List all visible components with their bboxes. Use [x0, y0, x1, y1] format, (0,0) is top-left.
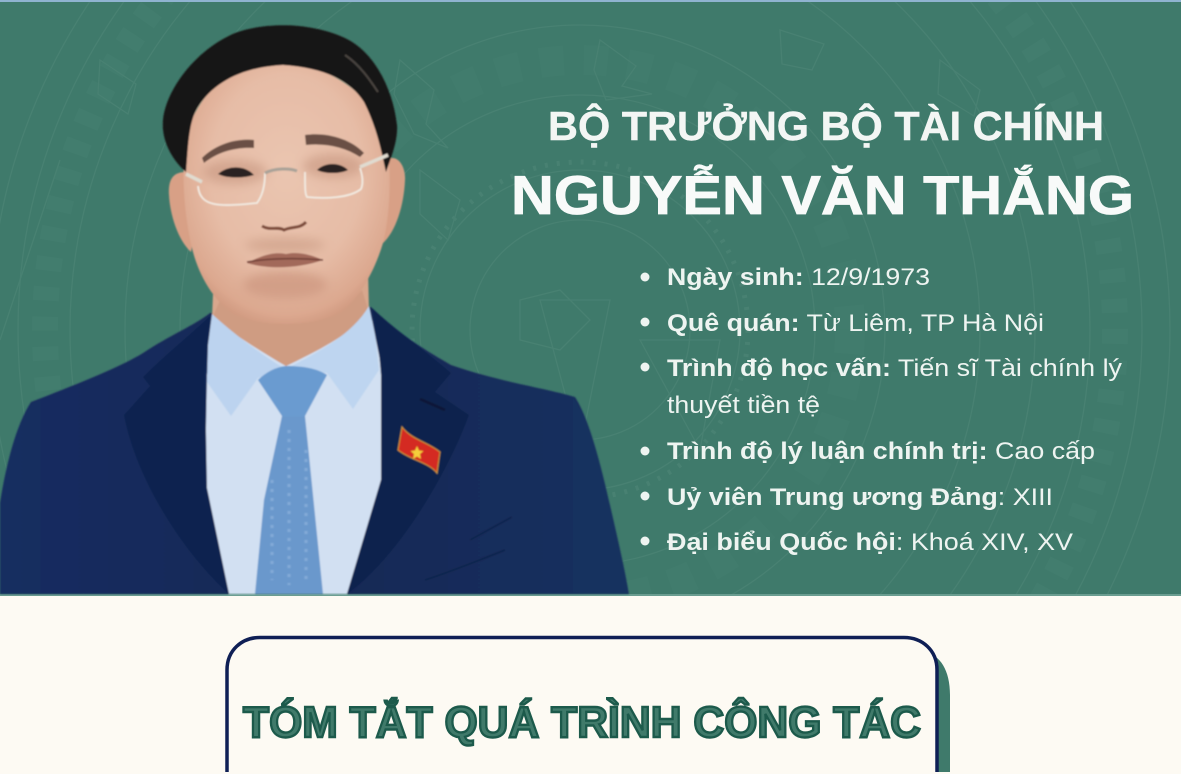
bullet: political theory: Trình độ lý luận chính trị: Cao cấp: [667, 438, 1095, 465]
bullet: education: thuyết tiền tệ: [667, 392, 820, 419]
suit jacket: [0, 307, 629, 594]
bullet: education: [640, 355, 1123, 419]
lapels: [124, 316, 229, 594]
shirt collar: [207, 314, 284, 416]
bullet: education: Trình độ học vấn: Tiến sĩ Tài chính lý: [667, 355, 1123, 382]
neck: [212, 270, 369, 366]
eyebrows: [202, 140, 254, 163]
drum pattern background: [0, 2, 1170, 594]
portrait of the minister: [0, 25, 629, 594]
bullet: party central committee: Uỷ viên Trung ương Đảng : XIII: [667, 484, 1053, 511]
nose: [262, 222, 306, 230]
face: [183, 62, 390, 324]
hair: [163, 25, 397, 172]
header panel: green background: [0, 0, 1181, 596]
glasses: [186, 155, 388, 205]
eyes: [218, 167, 254, 178]
bullet: hometown: Quê quán: Từ Liêm, TP Hà Nội: [667, 310, 1044, 337]
mouth: [247, 253, 323, 267]
bullet: date of birth: Ngày sinh: 12/9/1973: [667, 264, 930, 291]
parliament flag pin: [398, 427, 440, 473]
shirt: [205, 320, 382, 594]
biography list: [640, 264, 1123, 556]
section heading text: TÓM TẮT QUÁ TRÌNH CÔNG TÁC: [243, 696, 921, 747]
tie: [258, 366, 327, 416]
section heading box: [227, 638, 950, 772]
title: name: NGUYỄN VĂN THẮNG: [511, 164, 1134, 226]
title: position: BỘ TRƯỞNG BỘ TÀI CHÍNH: [548, 103, 1104, 149]
bullet: national assembly: Đại biểu Quốc hội : Khoá XIV, XV: [667, 529, 1074, 556]
ears: [169, 172, 196, 252]
face shading: [203, 160, 267, 184]
